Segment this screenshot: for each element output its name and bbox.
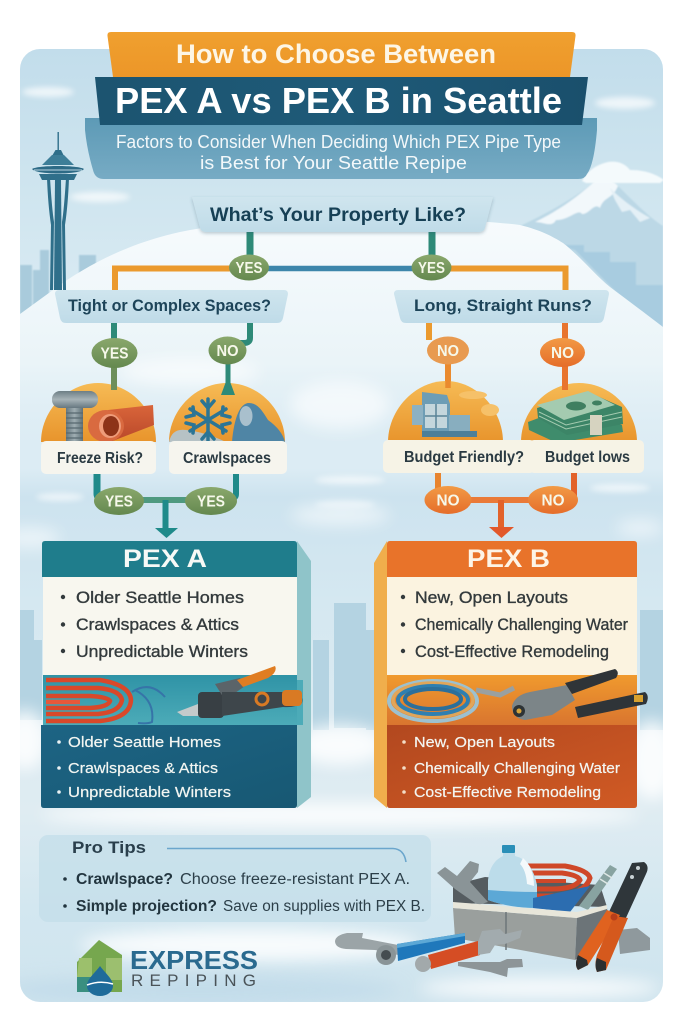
PEX A dark list: Older Seattle Homes [68, 735, 221, 751]
dome: freeze risk pipe icon [41, 362, 156, 442]
icon: Space Needle [32, 132, 84, 290]
PEX B header: PEX B [467, 545, 550, 573]
PEX B light list: Chemically Challenging Water [415, 616, 628, 634]
left skyline [20, 250, 96, 315]
PEX B product strip [387, 669, 648, 725]
tip: simple projection: Save on supplies with PEX B. [223, 898, 425, 915]
title banner: navy: PEX A vs PEX B in Seattle [115, 80, 562, 121]
logo: Express Repiping: EXPRESS [130, 945, 258, 975]
subtitle band: is Best for Your Seattle Repipe [200, 153, 467, 173]
dome: money stack icon [521, 362, 637, 443]
connectors: second level [114, 323, 565, 395]
PEX A light list: Crawlspaces & Attics [76, 616, 239, 634]
connector: left merge and arrow [97, 474, 236, 538]
PEX A header: PEX A [123, 545, 207, 573]
distant skyline [20, 603, 663, 730]
NO bubble: tight spaces: NO [216, 343, 238, 360]
NO bubble: straight runs 1: NO [437, 343, 459, 360]
NO bubble: budget friendly [424, 486, 472, 514]
illustration: toolbox and tools [335, 845, 650, 977]
YES bubble top left: YES [236, 260, 262, 277]
PEX B dark list: New, Open Layouts [414, 735, 555, 751]
panel: PEX B [374, 541, 648, 808]
YES bubble top right [412, 254, 452, 280]
PEX B light list: Cost-Effective Remodeling [415, 643, 609, 661]
PEX A dark list: Crawlspaces & Attics [68, 761, 218, 777]
PEX B dark list: Chemically Challenging Water [414, 761, 620, 777]
icon: house with water drop [77, 940, 122, 996]
PEX A dark list [41, 725, 297, 808]
PEX B light list: New, Open Layouts [415, 589, 568, 607]
subtitle band: Factors to Consider When Deciding Which PEX Pipe Type [116, 132, 561, 152]
toolbox back wall [453, 877, 607, 907]
label: Crawlspaces [169, 441, 287, 474]
YES bubble: tight spaces [92, 338, 138, 368]
NO bubble: tight spaces [208, 336, 246, 364]
label: Crawlspaces: Crawlspaces [183, 450, 271, 467]
icon: expansion tool [177, 666, 302, 718]
YES bubble: freeze risk [94, 487, 144, 515]
label: Budget Friendly: Budget Friendly? [404, 449, 524, 466]
icon: metal toolbox [453, 902, 611, 960]
PEX A light list: Older Seattle Homes [76, 589, 244, 607]
connectors: top flow [115, 232, 566, 290]
threaded T bolt [66, 405, 83, 442]
icon: blue and orange coil [389, 681, 514, 721]
tip: crawlspace: Crawlspace? [76, 871, 173, 888]
subtitle band [85, 118, 597, 179]
mountain [520, 178, 663, 330]
NO bubble: straight runs 1 [427, 336, 469, 364]
label: Freeze Risk: Freeze Risk? [57, 450, 143, 467]
question: Long, Straight Runs [394, 290, 609, 323]
tip: simple projection: Simple projection? [76, 898, 217, 915]
NO bubble: straight runs 2: NO [551, 345, 574, 362]
connector: right merge and arrow [438, 473, 574, 538]
icon: blue wrench [335, 933, 465, 965]
icon: adjustable wrench in box [437, 861, 488, 905]
logo: Express Repiping [77, 940, 258, 996]
NO bubble: straight runs 2 [540, 338, 585, 367]
YES bubble: freeze risk: YES [105, 494, 133, 510]
label: Budget lows [529, 440, 644, 473]
PEX A header [42, 541, 297, 577]
dome: budget building icon [388, 362, 503, 442]
icon: grey brick [618, 928, 650, 954]
logo: Express Repiping: REPIPING [131, 971, 256, 990]
question: Tight or Complex Spaces: Tight or Complex Spaces? [68, 297, 271, 315]
NO bubble: budget lows [528, 486, 578, 514]
YES bubble top right: YES [418, 260, 445, 277]
icon: blue folder [533, 886, 590, 912]
panel: PEX A [41, 541, 311, 808]
dome: crawlspace snowflake icon [169, 362, 285, 442]
YES bubble: tight spaces: YES [100, 346, 128, 362]
question: What's Your Property Like [192, 197, 493, 232]
question: Tight or Complex Spaces [55, 290, 288, 323]
icon: bottom wrench [458, 959, 523, 977]
copper pipe [108, 405, 154, 442]
panel: Pro Tips: Pro Tips [72, 838, 146, 857]
YES bubble: crawlspaces: YES [197, 494, 225, 510]
PEX B header [387, 541, 637, 577]
PEX A dark list: Unpredictable Winters [68, 785, 231, 801]
tip: simple projection [63, 898, 425, 915]
icon: orange pliers [576, 862, 648, 972]
PEX B dark list: Cost-Effective Remodeling [414, 785, 601, 801]
title banner: orange [107, 32, 576, 77]
label: Budget Friendly [383, 440, 535, 473]
label: Freeze Risk [41, 441, 156, 474]
icon: threaded pipe [579, 865, 617, 910]
YES bubble: crawlspaces [185, 487, 237, 515]
PEX A product strip [43, 666, 303, 725]
YES bubble top left [229, 254, 269, 280]
tip: crawlspace [63, 871, 410, 888]
icon: red coil in box [522, 866, 590, 896]
NO bubble: budget lows: NO [542, 492, 564, 510]
icon: red PEX coil [46, 680, 165, 723]
question: Long, Straight Runs: Long, Straight Runs? [414, 297, 592, 315]
icon: red wrench [415, 929, 522, 972]
NO bubble: budget friendly: NO [436, 492, 460, 510]
PEX A light list: Unpredictable Winters [76, 643, 248, 661]
label: Budget lows: Budget lows [545, 449, 630, 466]
tip: crawlspace: Choose freeze-resistant PEX A. [180, 871, 410, 888]
title banner: orange: How to Choose Between [176, 39, 496, 69]
PEX A light list [43, 577, 297, 675]
panel: Pro Tips [39, 835, 431, 922]
PEX B light list [387, 577, 637, 675]
PEX B dark list [387, 725, 637, 808]
icon: crimp tool [512, 669, 648, 720]
icon: blue jug [488, 845, 537, 908]
question: What's Your Property Like: What’s Your Property Like? [210, 205, 466, 226]
